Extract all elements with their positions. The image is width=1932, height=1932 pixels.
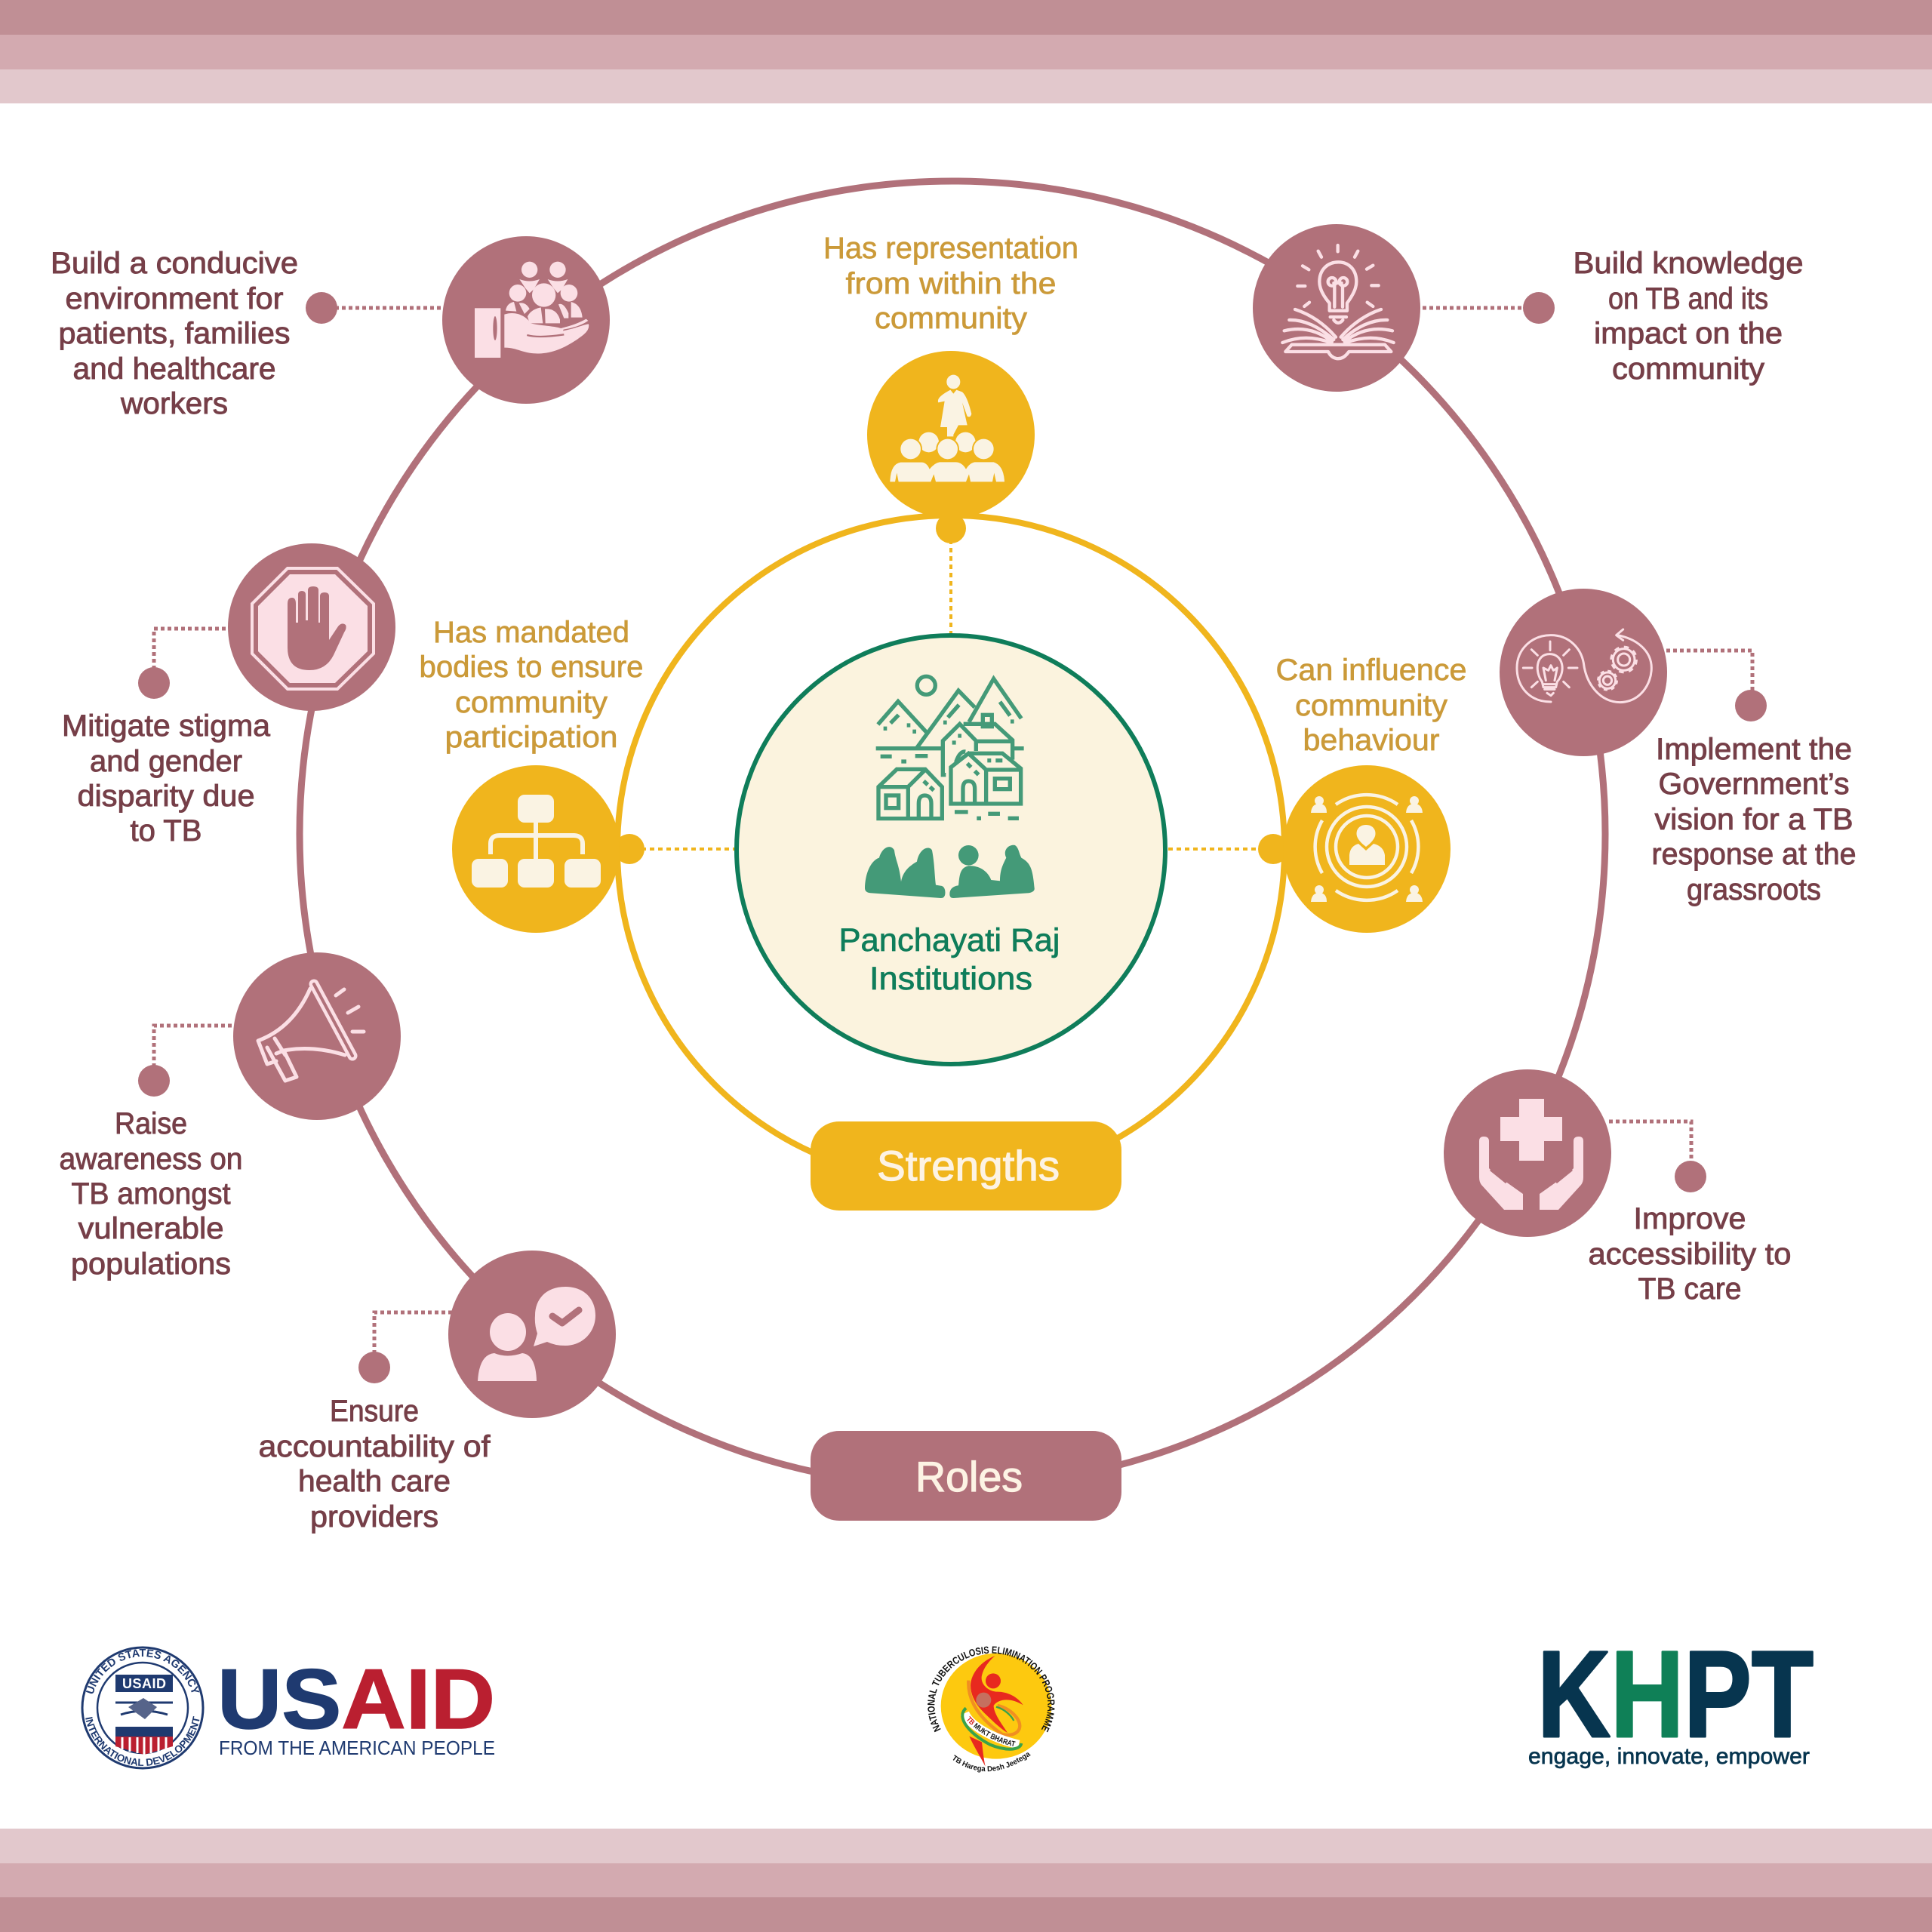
logo: USAID wordmark: USAID xyxy=(217,1652,495,1746)
text: role conducive environment: patients, families xyxy=(59,317,290,350)
text: role accountability: Ensure xyxy=(330,1395,419,1428)
text: role accountability xyxy=(258,1395,491,1534)
role: conducive environment xyxy=(442,236,610,404)
icon: person with check bubble xyxy=(478,1287,595,1381)
role: implement vision xyxy=(1500,589,1667,756)
icon: org chart xyxy=(472,795,601,888)
role: accountability xyxy=(448,1251,616,1418)
text: role raise awareness: vulnerable xyxy=(78,1212,223,1245)
text: role raise awareness: awareness on xyxy=(59,1143,243,1176)
text: role implement vision: Government’s xyxy=(1659,768,1849,801)
inner ring: strengths xyxy=(617,515,1284,1183)
text: role mitigate stigma: to TB xyxy=(130,814,202,848)
logo: KHPT: KHPT xyxy=(1537,1625,1814,1763)
logo: NTEP: TB MUKT BHARAT xyxy=(967,1716,1016,1746)
text: role conducive environment: and healthcare xyxy=(72,352,276,386)
connector lines for strengths xyxy=(641,540,1264,849)
roles label: Roles xyxy=(915,1453,1023,1500)
text: role mitigate stigma: Mitigate stigma xyxy=(62,709,271,743)
central circle xyxy=(737,635,1165,1064)
strengths label: Strengths xyxy=(877,1142,1060,1189)
text: role conducive environment: Build a conducive xyxy=(51,247,298,280)
role connector end dots xyxy=(138,292,1767,1383)
text: role improve accessibility: TB care xyxy=(1638,1272,1742,1306)
logo: USAID seal: USAID xyxy=(122,1676,166,1691)
text: strength mandated bodies: community xyxy=(455,686,608,719)
center heading: Institutions xyxy=(869,961,1032,997)
text: role build knowledge: Build knowledge xyxy=(1573,247,1804,280)
bottom decorative band xyxy=(0,1829,1932,1932)
logo: NTEP xyxy=(928,1647,1055,1772)
text: strength mandated bodies: bodies to ensure xyxy=(420,651,643,684)
text: role conducive environment: workers xyxy=(120,387,228,420)
logo: KHPT: engage, innovate, empower xyxy=(1528,1744,1810,1769)
outer ring: roles xyxy=(300,181,1605,1487)
text: role build knowledge xyxy=(1573,247,1804,386)
center heading xyxy=(839,922,1060,997)
strengths label xyxy=(811,1121,1121,1211)
icon: seated villagers xyxy=(865,845,1035,898)
strength connector end dots xyxy=(614,513,1288,864)
text: role mitigate stigma: and gender xyxy=(90,745,242,778)
logo: NTEP: TB Harega Desh Jeetega xyxy=(952,1752,1031,1772)
icon: hand holding people xyxy=(475,262,589,358)
text: role implement vision: response at the xyxy=(1651,838,1857,871)
text: role implement vision: grassroots xyxy=(1687,873,1821,906)
icon: cross with hands xyxy=(1479,1099,1583,1210)
top decorative band xyxy=(0,0,1932,103)
text: strength mandated bodies: Has mandated xyxy=(433,616,629,649)
logo: USAID seal: INTERNATIONAL DEVELOPMENT xyxy=(85,1716,199,1766)
strength: influence xyxy=(1283,765,1451,933)
text: role conducive environment xyxy=(51,247,298,420)
text: strength influence xyxy=(1275,654,1467,757)
text: role improve accessibility xyxy=(1588,1202,1792,1306)
text: strength influence: community xyxy=(1295,689,1447,722)
text: role accountability: providers xyxy=(310,1500,438,1534)
text: strength mandated bodies xyxy=(420,616,643,754)
icon: leader above group xyxy=(890,375,1004,481)
text: role raise awareness: Raise xyxy=(115,1107,187,1140)
text: role raise awareness xyxy=(59,1107,243,1281)
text: role accountability: health care xyxy=(298,1465,451,1498)
text: strength mandated bodies: participation xyxy=(445,721,617,754)
text: strength representation: from within the xyxy=(845,267,1057,300)
icon: lightbulb over open book xyxy=(1282,245,1394,358)
text: role mitigate stigma: disparity due xyxy=(77,780,255,813)
icon: person with rings xyxy=(1311,795,1423,902)
roles label xyxy=(811,1431,1121,1521)
role: mitigate stigma xyxy=(228,543,395,711)
text: role implement vision: Implement the xyxy=(1656,733,1852,766)
logo: USAID seal: UNITED STATES AGENCY xyxy=(86,1649,199,1694)
text: role raise awareness: populations xyxy=(71,1247,231,1281)
logo: USAID seal xyxy=(82,1647,204,1769)
text: role build knowledge: community xyxy=(1612,352,1764,386)
text: role accountability: accountability of xyxy=(258,1430,491,1463)
text: role raise awareness: TB amongst xyxy=(71,1177,231,1211)
text: strength representation: community xyxy=(875,302,1027,335)
text: role build knowledge: on TB and its xyxy=(1608,282,1768,315)
strength: mandated bodies xyxy=(452,765,620,933)
text: strength representation xyxy=(823,232,1078,335)
icon: village xyxy=(876,676,1024,819)
connector lines for roles xyxy=(154,308,1752,1367)
logo: USAID wordmark: FROM THE AMERICAN PEOPLE xyxy=(219,1737,495,1759)
text: role improve accessibility: accessibility to xyxy=(1588,1238,1792,1271)
icon: stop hand xyxy=(252,568,374,689)
text: role implement vision: vision for a TB xyxy=(1654,803,1854,836)
role: improve accessibility xyxy=(1444,1069,1611,1237)
text: strength representation: Has representation xyxy=(823,232,1078,265)
text: role conducive environment: environment for xyxy=(65,282,284,315)
text: role mitigate stigma xyxy=(62,709,271,848)
text: role build knowledge: impact on the xyxy=(1594,317,1783,350)
text: strength influence: Can influence xyxy=(1275,654,1467,687)
logo: NTEP: NATIONAL TUBERCULOSIS ELIMINATION PROGRAMME xyxy=(928,1647,1055,1733)
center heading: Panchayati Raj xyxy=(839,922,1060,958)
strength: representation xyxy=(867,351,1035,518)
role: raise awareness xyxy=(233,952,401,1120)
role: build knowledge xyxy=(1253,224,1420,392)
text: strength influence: behaviour xyxy=(1303,724,1440,757)
icon: idea to action cycle xyxy=(1517,629,1651,703)
text: role implement vision xyxy=(1651,733,1857,906)
text: role improve accessibility: Improve xyxy=(1633,1202,1746,1235)
icon: megaphone xyxy=(258,984,364,1081)
